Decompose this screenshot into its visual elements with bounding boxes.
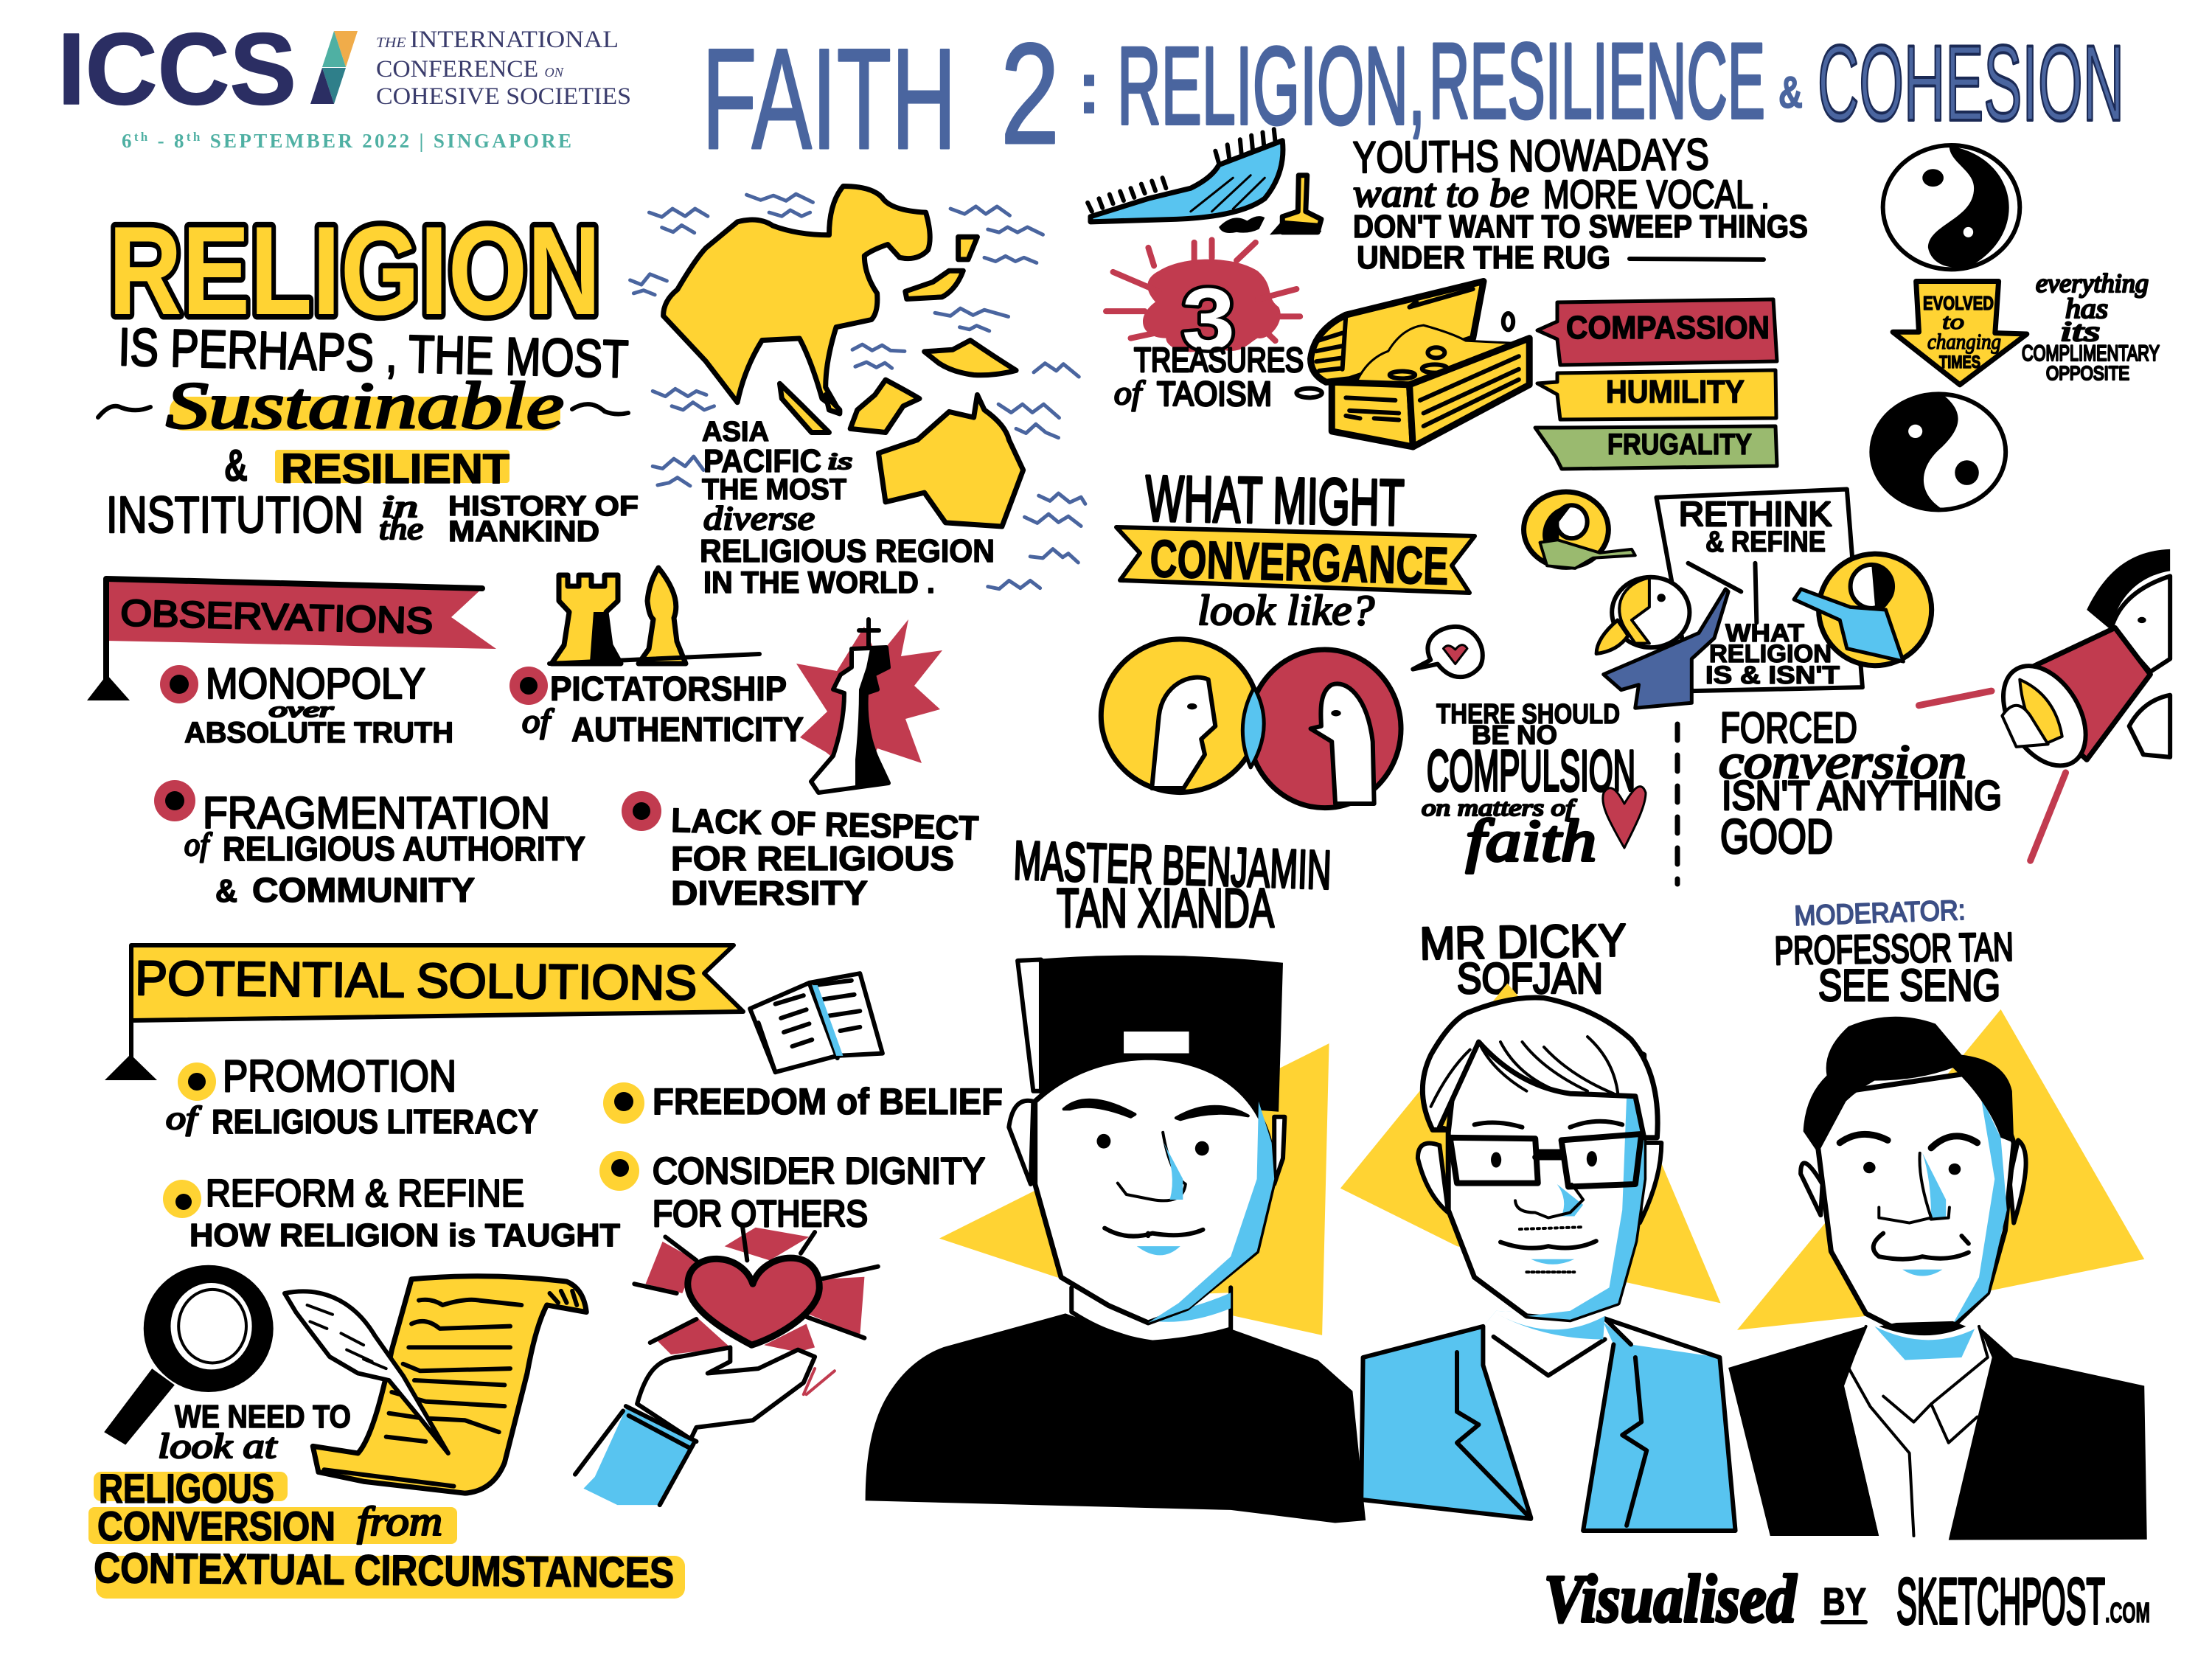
speaker name: dicky sofjan: SOFJAN: [1457, 955, 1603, 1003]
text: contextual circumstances: look at: [158, 1427, 278, 1466]
title: :: [1078, 46, 1100, 129]
icon: chess rook and bishop: [549, 568, 759, 664]
icon: evolved arrow: [1893, 281, 2027, 385]
heading: religion statement: RESILIENT: [281, 445, 509, 493]
icon: magnifying glass: [104, 1265, 274, 1444]
text: Asia Pacific: THE MOST: [702, 473, 846, 506]
title: RESILIENCE: [1429, 21, 1765, 141]
heading: what might convergance look like: CONVERGANCE: [1150, 529, 1450, 597]
bullet: promotion: PROMOTION: [223, 1051, 456, 1101]
bullet: consider dignity: [599, 1150, 985, 1234]
text: evolved to changing times: [1923, 292, 2001, 372]
text: no compulsion: THERE SHOULD: [1436, 699, 1620, 730]
bullet: lack of respect: FOR RELIGIOUS: [671, 839, 954, 877]
heading: religion statement: IS PERHAPS , THE MOST: [118, 318, 629, 389]
title: FAITH: [702, 19, 956, 179]
text: forced conversion: GOOD: [1720, 809, 1833, 863]
icon: rethink and refine poster: WHAT: [1725, 619, 1804, 647]
text: no compulsion: BE NO: [1472, 720, 1557, 750]
text: complimentary opposite: its: [2060, 316, 2100, 347]
text: Asia Pacific: PACIFIC: [703, 443, 821, 479]
text: youths nowadays: UNDER THE RUG: [1357, 240, 1610, 276]
heading: religion statement: MANKIND: [448, 515, 599, 548]
bullet: reform and refine: [163, 1172, 620, 1253]
bullet: dictatorship: PICTATORSHIP: [550, 669, 787, 708]
title: &: [1778, 68, 1803, 117]
text: youths nowadays: want to be: [1353, 171, 1529, 215]
icon: rug and broom: [1088, 129, 1321, 234]
icon: open book: [750, 973, 883, 1072]
ICCS logo: THE INTERNATIONAL: [376, 27, 619, 53]
bullet: promotion: [166, 1051, 538, 1141]
text: contextual circumstances: from: [357, 1499, 442, 1545]
speaker name: master benjamin: [1012, 830, 1332, 939]
text: complimentary opposite: everything: [2036, 268, 2149, 298]
bullet: fragmentation: [154, 780, 585, 909]
speaker name: dicky sofjan: MR DICKY: [1419, 915, 1627, 970]
bullet: freedom of belief: FREEDOM of BELIEF: [653, 1081, 1003, 1122]
map: Asia Pacific: [630, 186, 1085, 589]
bullet: lack of respect: [622, 791, 979, 912]
speaker name: moderator: PROFESSOR TAN: [1774, 925, 2014, 973]
bullet: dictatorship: of: [522, 702, 555, 740]
heading: religion statement: Sustainable: [166, 369, 564, 442]
islands: [779, 237, 1023, 526]
text: no compulsion: [1422, 699, 1646, 874]
icon: red splat with number 3: of: [1114, 374, 1146, 411]
portrait: master benjamin: [866, 956, 1366, 1523]
bullet: monopoly: [160, 660, 453, 749]
ICCS logo: th: [134, 130, 148, 144]
heading: religion statement: RELIGION: [108, 201, 601, 341]
bullet: fragmentation: FRAGMENTATION: [203, 788, 550, 838]
text: contextual circumstances: CONVERSION: [97, 1503, 335, 1549]
boxes: three treasures: FRUGALITY: [1607, 428, 1752, 461]
boxes: three treasures: HUMILITY: [1606, 374, 1745, 410]
icon: chess king in burst: [796, 619, 942, 793]
text: forced conversion: conversion: [1719, 735, 1966, 789]
ICCS logo: th: [187, 130, 201, 144]
icon: megaphone and speaker: [1919, 549, 2170, 860]
signature: visualised by sketchpost: [1544, 1561, 2150, 1638]
text: forced conversion: [1719, 704, 2002, 863]
icon: rethink and refine poster: & REFINE: [1705, 526, 1826, 558]
text: complimentary opposite: OPPOSITE: [2046, 362, 2129, 384]
icon: rethink and refine poster: RELIGION: [1709, 640, 1832, 668]
text: no compulsion: faith: [1466, 809, 1596, 874]
speaker name: master benjamin: TAN XIANDA: [1057, 877, 1274, 939]
text: youths nowadays: MORE VOCAL .: [1543, 173, 1770, 217]
bullet: consider dignity: FOR OTHERS: [653, 1193, 868, 1234]
icon: treasure chest: [1296, 281, 1529, 447]
boxes: three treasures: [1535, 299, 1777, 469]
heading: what might convergance look like: look like?: [1197, 586, 1374, 634]
text: Asia Pacific: ASIA: [702, 417, 769, 448]
boxes: three treasures: COMPASSION: [1566, 310, 1770, 346]
text: complimentary opposite: COMPLIMENTARY: [2022, 341, 2160, 366]
heading: religion statement: the: [379, 512, 423, 546]
icon: figures: [1524, 492, 1932, 708]
icon: yin yang top: [1883, 145, 2020, 269]
icon: red splat with number 3: TAOISM: [1157, 375, 1272, 413]
mainland Asia: [664, 186, 930, 411]
text: Asia Pacific: diverse: [703, 499, 815, 537]
bullet: consider dignity: CONSIDER DIGNITY: [653, 1150, 985, 1192]
icon: heart in hand: [575, 1228, 878, 1505]
speaker name: master benjamin: MASTER BENJAMIN: [1012, 830, 1332, 901]
icon: red splat with number 3: 3: [1182, 271, 1235, 368]
icon: scroll and quill: [285, 1276, 586, 1493]
speaker name: moderator: [1774, 895, 2014, 1010]
text: youths nowadays: [1353, 130, 1808, 276]
ICCS logo: [58, 13, 631, 152]
text: Asia Pacific: is: [827, 448, 852, 474]
bullet: dictatorship: AUTHENTICITY: [571, 710, 804, 748]
text: contextual circumstances: CONTEXTUAL CIRCUMSTANCES: [94, 1544, 674, 1597]
ICCS logo: CONFERENCE ON: [376, 56, 564, 83]
banner: potential solutions: [105, 945, 743, 1080]
text: forced conversion: ISN'T ANYTHING: [1722, 772, 2002, 818]
bullet: fragmentation: &: [215, 873, 237, 909]
text: contextual circumstances: [88, 1399, 685, 1599]
banner: potential solutions: POTENTIAL SOLUTIONS: [135, 950, 697, 1010]
icon: rethink and refine poster: [1656, 489, 1863, 691]
icon: rethink and refine poster: IS & ISN'T: [1705, 661, 1840, 689]
bullet: fragmentation: of: [184, 827, 213, 863]
bullet: monopoly: ABSOLUTE TRUTH: [184, 717, 453, 749]
heading: religion statement: HISTORY OF: [448, 491, 639, 522]
bullet: fragmentation: COMMUNITY: [252, 871, 475, 909]
text: evolved to changing times: to: [1942, 310, 1964, 334]
signature: visualised by sketchpost: .COM: [2105, 1598, 2150, 1629]
speaker name: dicky sofjan: [1419, 915, 1627, 1003]
heading: what might convergance look like: WHAT MIGHT: [1145, 462, 1405, 539]
icon: yin yang bottom: [1871, 394, 2006, 510]
banner: observations: OBSERVATIONS: [120, 592, 434, 641]
text: Asia Pacific: [700, 417, 995, 599]
icon: red splat with number 3: [1106, 240, 1304, 413]
title: [702, 14, 2124, 179]
banner: observations: [87, 579, 496, 700]
icon: venn diagram faces: [1101, 639, 1401, 808]
text: no compulsion: on matters of: [1422, 794, 1577, 821]
bullet: promotion: RELIGIOUS LITERACY: [212, 1102, 538, 1141]
bullet: monopoly: over: [269, 699, 333, 722]
heading: religion statement: &: [224, 441, 248, 490]
text: contextual circumstances: RELIGOUS: [99, 1465, 274, 1512]
text: forced conversion: FORCED: [1720, 704, 1857, 752]
text: youths nowadays: YOUTHS NOWADAYS: [1353, 130, 1709, 182]
text: evolved to changing times: changing: [1927, 330, 2001, 354]
text: evolved to changing times: EVOLVED: [1923, 292, 1994, 314]
text: complimentary opposite: [2022, 268, 2160, 384]
ICCS logo: 6: [122, 130, 131, 152]
bullet: monopoly: MONOPOLY: [206, 660, 425, 708]
bullet: dictatorship: [509, 667, 804, 748]
text: Asia Pacific: IN THE WORLD .: [703, 565, 935, 599]
bullet: reform and refine: REFORM & REFINE: [206, 1172, 524, 1215]
icon: rethink and refine poster: RETHINK: [1679, 495, 1832, 533]
ICCS logo: SEPTEMBER 2022 | SINGAPORE: [203, 130, 571, 152]
text: contextual circumstances: WE NEED TO: [175, 1399, 351, 1435]
portrait: moderator tan see seng: [1728, 1009, 2147, 1540]
text: complimentary opposite: has: [2065, 293, 2108, 324]
bullet: lack of respect: DIVERSITY: [671, 874, 868, 912]
signature: visualised by sketchpost: BY: [1823, 1581, 1866, 1624]
title: 2: [1001, 14, 1060, 174]
speaker name: moderator: SEE SENG: [1818, 961, 2000, 1010]
bullet: promotion: of: [166, 1100, 202, 1136]
ICCS logo: ICCS: [58, 13, 296, 126]
bullet: reform and refine: HOW RELIGION is TAUGHT: [189, 1217, 620, 1253]
heading: religion statement: in: [381, 490, 418, 524]
icon: red splat with number 3: TREASURES: [1134, 341, 1304, 379]
heading: religion statement: INSTITUTION: [106, 486, 364, 543]
signature: visualised by sketchpost: Visualised: [1544, 1561, 1798, 1636]
portrait: dicky sofjan: [1340, 984, 1736, 1531]
text: no compulsion: COMPULSION: [1427, 738, 1635, 803]
ICCS logo: COHESIVE SOCIETIES: [376, 83, 631, 110]
text: Asia Pacific: RELIGIOUS REGION: [700, 533, 995, 569]
heading: what might convergance look like: [1116, 462, 1475, 634]
text: evolved to changing times: TIMES: [1939, 352, 1980, 372]
bullet: fragmentation: RELIGIOUS AUTHORITY: [223, 830, 585, 868]
ICCS logo: - 8: [150, 130, 184, 152]
icon: speech bubble heart: [1413, 627, 1483, 677]
text: youths nowadays: DON'T WANT TO SWEEP THINGS: [1353, 209, 1808, 245]
bullet: lack of respect: LACK OF RESPECT: [671, 801, 979, 847]
title: RELIGION,: [1117, 24, 1425, 147]
heading: religion statement: [98, 201, 639, 548]
speaker name: moderator: MODERATOR:: [1794, 895, 1966, 932]
